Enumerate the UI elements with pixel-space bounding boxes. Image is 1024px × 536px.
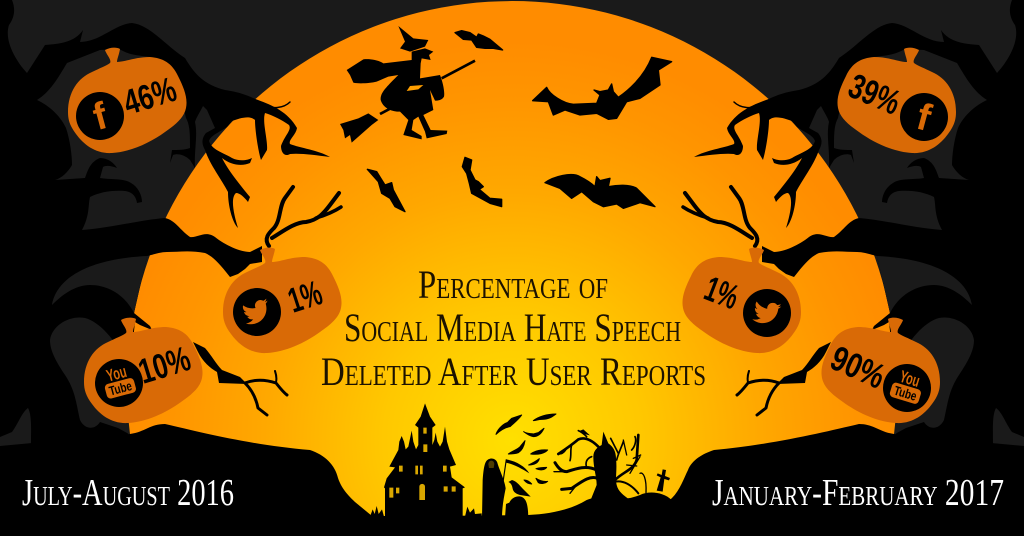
pumpkin: YouTube January-February 90%: [821, 318, 940, 423]
gray blob behind tree: [50, 317, 129, 434]
icon: flying witch on broomstick: [340, 26, 475, 143]
lower left bat: [367, 169, 405, 212]
large top bat: [533, 57, 672, 119]
icon: flock of bats: [496, 414, 556, 484]
pumpkin: Facebook July-August 46%: f: [89, 95, 112, 139]
pumpkin: Facebook July-August 46%: 46%: [119, 70, 181, 123]
graveyard scene: [370, 403, 690, 536]
pumpkin: YouTube July-August 10%: Tube: [107, 378, 133, 399]
pumpkin: YouTube July-August 10%: [84, 318, 203, 423]
date label: left: July-August 2016: [22, 472, 234, 514]
small top bat: [455, 31, 503, 50]
pumpkin: YouTube January-February 90%: 90%: [825, 339, 891, 397]
lower right bat: [545, 175, 655, 208]
pumpkin: YouTube January-February 90%: You: [897, 367, 922, 391]
pumpkin: YouTube January-February 90%: Tube: [892, 383, 919, 404]
icon: grim reaper: [482, 459, 529, 518]
pumpkin: Twitter July-August 1%: 1%: [283, 273, 327, 321]
title: Social Media Hate Speech: [344, 305, 681, 350]
pumpkin: Facebook January-February 39%: f: [912, 96, 936, 140]
pumpkin: Facebook January-February 39%: 39%: [843, 66, 906, 123]
icon: bats: [367, 31, 672, 212]
icon: grave cross: [657, 469, 670, 492]
icon: crow: [508, 480, 531, 497]
pumpkin: YouTube July-August 10%: 10%: [134, 339, 195, 392]
scene ground: [370, 469, 690, 536]
icon: grass: [370, 506, 482, 517]
icon: dead tree: [554, 429, 646, 502]
title: Deleted After User Reports: [321, 349, 706, 394]
title: [321, 262, 706, 394]
pumpkin: Twitter July-August 1%: [223, 248, 342, 353]
gray tree stump: [0, 408, 31, 446]
icon: tombstone: [505, 496, 528, 518]
right tree silhouette: [683, 0, 1024, 450]
gray arc behind tree: [52, 256, 147, 313]
pumpkin: Facebook January-February 39%: [837, 48, 956, 153]
title: Percentage of: [418, 262, 608, 307]
moon: [127, 1, 897, 536]
moon branches: [245, 102, 341, 415]
pumpkin: YouTube July-August 10%: You: [104, 362, 129, 386]
pumpkin: Facebook July-August 46%: [68, 48, 187, 153]
pumpkin: Twitter January-February 1%: 1%: [699, 269, 744, 317]
ground: [0, 424, 1024, 536]
pumpkin: Twitter January-February 1%: [682, 248, 801, 353]
lower middle bat: [462, 157, 502, 207]
thick lower branch: [193, 342, 247, 384]
icon: haunted house: [384, 403, 465, 518]
left tree silhouette: [0, 0, 341, 450]
